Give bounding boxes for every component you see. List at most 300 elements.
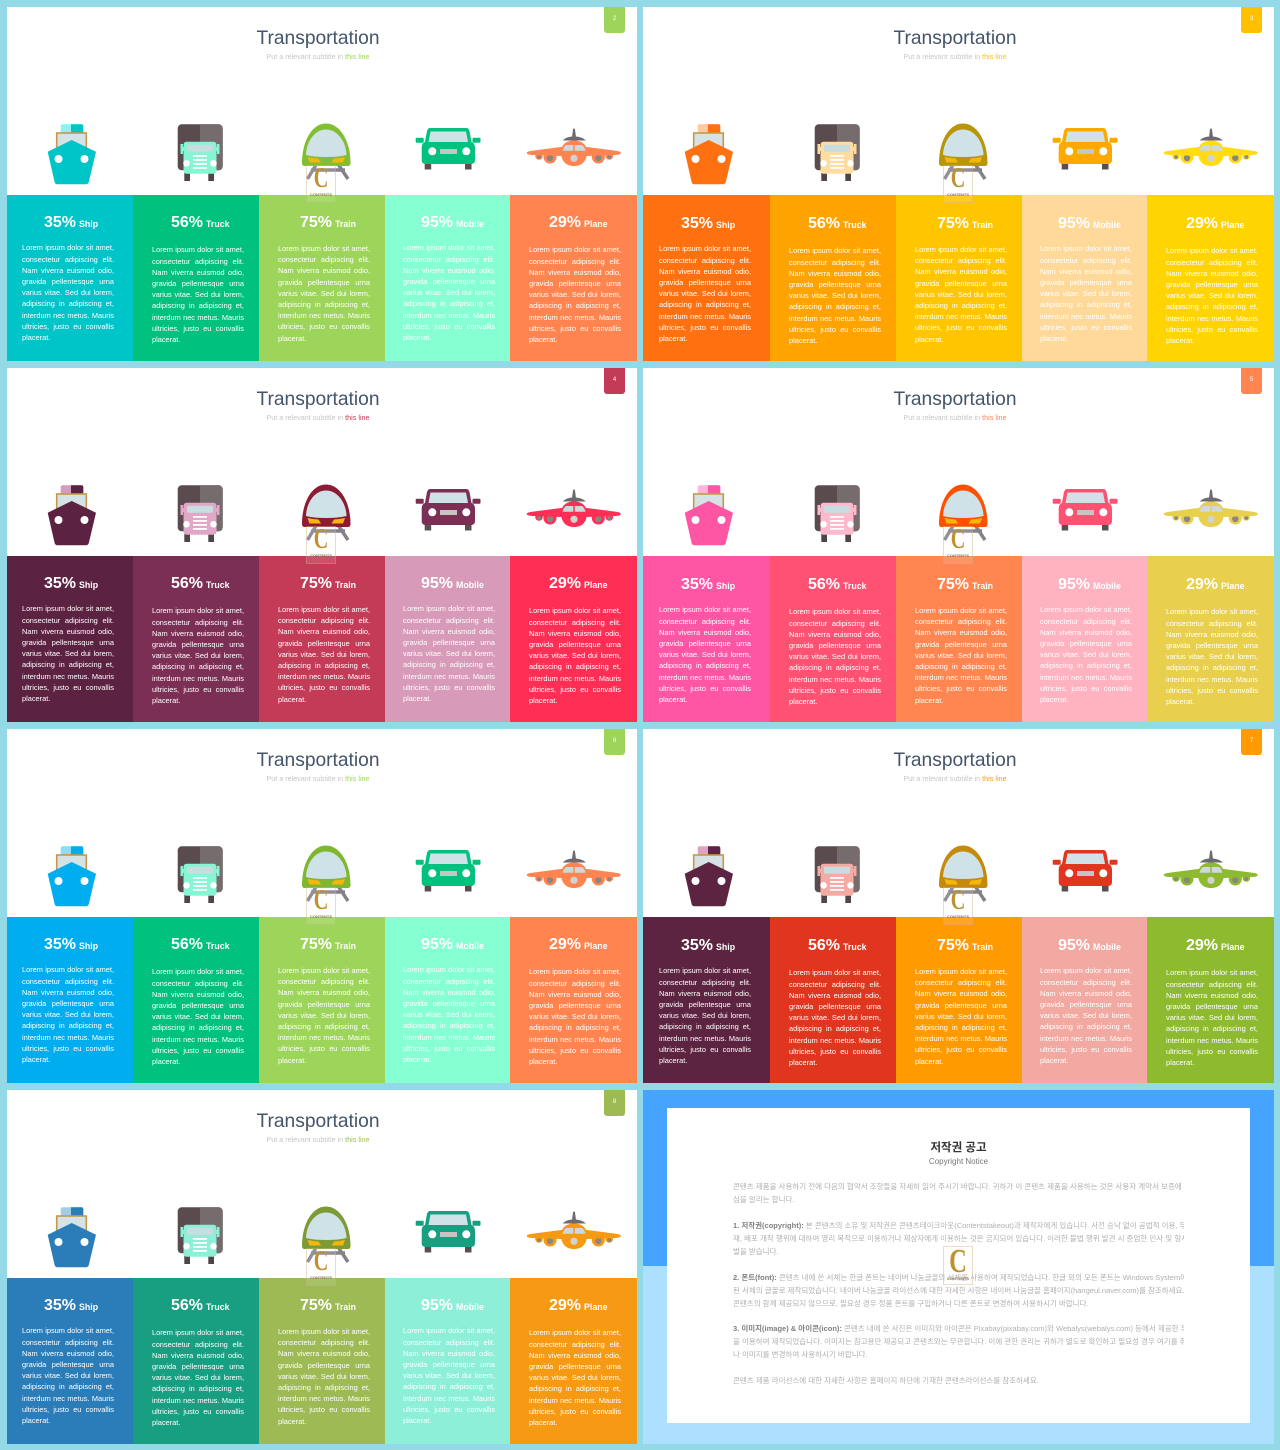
icon: plane	[527, 850, 621, 888]
watermark	[943, 165, 973, 203]
panel: mobile: interdum nec metus. Mauris	[403, 1033, 495, 1042]
panel: mobile: gravida pellentesque urna	[1040, 1000, 1132, 1009]
page number tab: 8	[613, 1099, 616, 1105]
icon: truck	[178, 846, 223, 903]
title: Transportation	[893, 388, 1016, 410]
icon: car	[416, 1211, 480, 1252]
panel: ship: consectetur adipiscing elit.	[22, 1338, 114, 1347]
panel: train: 75% Train	[300, 214, 356, 231]
panel: ship: consectetur adipiscing elit.	[659, 978, 751, 987]
slide 7: burgundy, red and olive theme	[644, 729, 1274, 1083]
watermark: C	[951, 524, 965, 555]
panel: mobile: adipiscing in adipiscing et,	[403, 660, 495, 669]
panel: plane: consectetur adipiscing elit.	[1166, 619, 1258, 628]
notice heading: 저작권 공고	[930, 1142, 987, 1154]
panel: plane	[1146, 917, 1274, 1083]
panel: mobile: placerat.	[1040, 1056, 1068, 1065]
panel: train: consectetur adipiscing elit.	[278, 977, 370, 986]
panel: train: interdum nec metus. Mauris	[278, 1033, 370, 1042]
panel: mobile: Nam viverra euismod odio,	[1040, 267, 1132, 276]
panel: train: interdum nec metus. Mauris	[915, 1034, 1007, 1043]
panel: train: 75% Train	[937, 215, 993, 232]
panel: plane: placerat.	[529, 1057, 557, 1066]
panel: ship: interdum nec metus. Mauris	[659, 1034, 751, 1043]
panel: truck: interdum nec metus. Mauris	[789, 675, 881, 684]
panel: ship: varius vitae. Sed dui lorem,	[22, 288, 114, 297]
panel: plane: Lorem ipsum dolor sit amet,	[1166, 246, 1258, 255]
panel: train: Nam viverra euismod odio,	[278, 988, 370, 997]
panel: ship	[7, 195, 132, 361]
panel: mobile: 95% Mobile	[1058, 215, 1121, 232]
panel: train: consectetur adipiscing elit.	[915, 256, 1007, 265]
watermark: CONTENTS	[310, 914, 332, 919]
icons row	[48, 124, 621, 184]
panel: truck: consectetur adipiscing elit.	[789, 980, 881, 989]
panel: ship	[643, 917, 770, 1083]
panel: ship: Nam viverra euismod odio,	[22, 1349, 114, 1358]
panel: plane: consectetur adipiscing elit.	[529, 979, 621, 988]
icons row	[684, 846, 1258, 906]
panel: ship: gravida pellentesque urna	[659, 639, 751, 648]
panel: mobile: 95% Mobile	[1058, 937, 1121, 954]
panel: mobile: Lorem ipsum dolor sit amet,	[1040, 605, 1132, 614]
panel: ship: consectetur adipiscing elit.	[22, 255, 114, 264]
panel: ship: ultricies, justo eu convallis	[22, 322, 114, 331]
panel: ship: ultricies, justo eu convallis	[659, 323, 751, 332]
panel: train: Nam viverra euismod odio,	[278, 1349, 370, 1358]
panel: truck: 56% Truck	[808, 937, 867, 954]
panel: plane: gravida pellentesque urna	[529, 1001, 621, 1010]
panel: truck: varius vitae. Sed dui lorem,	[152, 1373, 244, 1382]
panel: plane: interdum nec metus. Mauris	[1166, 314, 1258, 323]
panel: truck: 56% Truck	[171, 575, 230, 592]
panel: mobile: adipiscing in adipiscing et,	[403, 1382, 495, 1391]
panel: truck: Nam viverra euismod odio,	[152, 990, 244, 999]
panel: train: interdum nec metus. Mauris	[278, 672, 370, 681]
icon: train	[939, 846, 988, 901]
panel: truck: Lorem ipsum dolor sit amet,	[789, 968, 881, 977]
panel: plane: Lorem ipsum dolor sit amet,	[1166, 968, 1258, 977]
panel: train: placerat.	[915, 696, 943, 705]
panel: truck: varius vitae. Sed dui lorem,	[789, 1013, 881, 1022]
panel: plane: ultricies, justo eu convallis	[529, 1407, 621, 1416]
page number tab: 3	[1250, 16, 1253, 22]
panel: train: varius vitae. Sed dui lorem,	[278, 1372, 370, 1381]
panel: ship: placerat.	[659, 1056, 687, 1065]
panel: train: Nam viverra euismod odio,	[915, 267, 1007, 276]
watermark	[943, 1246, 973, 1285]
panel: mobile: ultricies, justo eu convallis	[403, 322, 495, 331]
panel: mobile: 95% Mobile	[1058, 576, 1121, 593]
icons row	[48, 846, 621, 906]
subtitle: Put a relevant subtitle in this line	[903, 52, 1007, 61]
panel: plane: adipiscing in adipiscing et,	[529, 662, 621, 671]
watermark	[306, 526, 336, 564]
panel: train: adipiscing in adipiscing et,	[915, 301, 1007, 310]
panel: train	[896, 195, 1022, 361]
panel: plane: Nam viverra euismod odio,	[529, 1351, 621, 1360]
icon: ship	[48, 846, 96, 906]
panel: mobile: 95% Mobile	[421, 936, 484, 953]
panel: train: Lorem ipsum dolor sit amet,	[278, 966, 370, 975]
page number tab	[604, 1090, 625, 1116]
subtitle: Put a relevant subtitle in this line	[903, 413, 1007, 422]
icon: car	[1053, 850, 1118, 892]
icon: train	[302, 484, 350, 540]
panel: train: consectetur adipiscing elit.	[278, 616, 370, 625]
title: Transportation	[893, 750, 1016, 770]
panel: plane	[510, 195, 637, 361]
panel: train: Lorem ipsum dolor sit amet,	[915, 606, 1007, 615]
panel: ship: placerat.	[659, 695, 687, 704]
panel: plane: adipiscing in adipiscing et,	[1166, 302, 1258, 311]
panel: truck: Nam viverra euismod odio,	[152, 1351, 244, 1360]
panel: mobile: gravida pellentesque urna	[403, 277, 495, 286]
panel: plane: ultricies, justo eu convallis	[529, 324, 621, 333]
panel: mobile: varius vitae. Sed dui lorem,	[403, 1371, 495, 1380]
panel: mobile: Nam viverra euismod odio,	[1040, 628, 1132, 637]
panel: truck: 56% Truck	[808, 576, 867, 593]
icon: plane	[1164, 850, 1258, 888]
panel: plane: gravida pellentesque urna	[529, 279, 621, 288]
panel: ship: consectetur adipiscing elit.	[22, 616, 114, 625]
panel: truck: adipiscing in adipiscing et,	[789, 663, 881, 672]
panel: plane: Lorem ipsum dolor sit amet,	[529, 1328, 621, 1337]
panel: truck: interdum nec metus. Mauris	[152, 1035, 244, 1044]
panel: ship: 35% Ship	[44, 214, 98, 231]
panel: mobile	[1022, 556, 1146, 722]
panel: mobile: Nam viverra euismod odio,	[403, 988, 495, 997]
panel: mobile: consectetur adipiscing elit.	[1040, 256, 1132, 265]
icon: car	[1053, 489, 1118, 530]
panel: train: gravida pellentesque urna	[915, 279, 1007, 288]
panel: plane: varius vitae. Sed dui lorem,	[529, 651, 621, 660]
intro text: 심을 알리는 합니다.	[733, 1195, 794, 1204]
panel: mobile: placerat.	[403, 694, 431, 703]
panel: truck	[770, 195, 896, 361]
panel: train: ultricies, justo eu convallis	[915, 323, 1007, 332]
panel: plane: gravida pellentesque urna	[529, 1362, 621, 1371]
panel: truck: interdum nec metus. Mauris	[789, 314, 881, 323]
panel: train: placerat.	[915, 335, 943, 344]
panel: ship: varius vitae. Sed dui lorem,	[22, 1371, 114, 1380]
icon: ship	[48, 124, 96, 184]
icon: plane	[527, 128, 621, 166]
panel: mobile: gravida pellentesque urna	[403, 1360, 495, 1369]
watermark	[306, 165, 336, 203]
panel: truck: Lorem ipsum dolor sit amet,	[789, 246, 881, 255]
watermark: CONTENTS	[310, 553, 332, 558]
panel: train: ultricies, justo eu convallis	[915, 1045, 1007, 1054]
icon: ship	[685, 485, 733, 545]
slide 3: orange and yellow theme	[644, 7, 1274, 361]
panel: plane: ultricies, justo eu convallis	[1166, 686, 1258, 695]
icon: train	[302, 846, 350, 901]
panel: train: ultricies, justo eu convallis	[278, 1405, 370, 1414]
panel: plane: varius vitae. Sed dui lorem,	[1166, 291, 1258, 300]
panel: plane: placerat.	[529, 1418, 557, 1427]
panel: train: interdum nec metus. Mauris	[278, 311, 370, 320]
panel: ship: Nam viverra euismod odio,	[659, 989, 751, 998]
panel: plane: consectetur adipiscing elit.	[529, 618, 621, 627]
panel: ship: consectetur adipiscing elit.	[659, 617, 751, 626]
panel: train: ultricies, justo eu convallis	[278, 1044, 370, 1053]
panel: ship: placerat.	[22, 1416, 50, 1425]
panel: ship	[7, 1278, 132, 1444]
panel: ship: adipiscing in adipiscing et,	[22, 1021, 114, 1030]
panel: ship: gravida pellentesque urna	[659, 1000, 751, 1009]
icon: truck	[178, 124, 223, 181]
panel: ship: Nam viverra euismod odio,	[659, 267, 751, 276]
panel: mobile: consectetur adipiscing elit.	[403, 616, 495, 625]
panel: ship: gravida pellentesque urna	[22, 999, 114, 1008]
panel: ship: varius vitae. Sed dui lorem,	[22, 1010, 114, 1019]
panel: plane: consectetur adipiscing elit.	[529, 1340, 621, 1349]
panel: mobile: placerat.	[403, 333, 431, 342]
panel: truck	[132, 195, 258, 361]
panel: truck: Nam viverra euismod odio,	[789, 269, 881, 278]
panel: mobile: consectetur adipiscing elit.	[1040, 978, 1132, 987]
panel: ship: varius vitae. Sed dui lorem,	[659, 650, 751, 659]
panel: ship: varius vitae. Sed dui lorem,	[659, 289, 751, 298]
panel: truck: ultricies, justo eu convallis	[789, 1047, 881, 1056]
panel: ship: gravida pellentesque urna	[22, 277, 114, 286]
panel: truck: gravida pellentesque urna	[152, 279, 244, 288]
watermark: C	[949, 1243, 967, 1280]
panel: train	[258, 195, 385, 361]
panel: train: adipiscing in adipiscing et,	[278, 300, 370, 309]
panel: ship	[7, 556, 132, 722]
panel: truck: gravida pellentesque urna	[789, 280, 881, 289]
panel: plane: placerat.	[1166, 697, 1194, 706]
panel: truck: ultricies, justo eu convallis	[152, 324, 244, 333]
panel: truck: 56% Truck	[171, 936, 230, 953]
panel: mobile: Lorem ipsum dolor sit amet,	[1040, 966, 1132, 975]
panel: mobile: consectetur adipiscing elit.	[1040, 617, 1132, 626]
panel: train: adipiscing in adipiscing et,	[278, 1022, 370, 1031]
panel: ship	[643, 556, 770, 722]
title: Transportation	[256, 1110, 380, 1132]
panel: train: gravida pellentesque urna	[278, 1361, 370, 1370]
panel: train: gravida pellentesque urna	[278, 639, 370, 648]
subtitle: Put a relevant subtitle in this line	[266, 413, 370, 422]
panel: mobile: varius vitae. Sed dui lorem,	[1040, 289, 1132, 298]
panel: mobile: Lorem ipsum dolor sit amet,	[403, 1326, 495, 1335]
icon: car	[1053, 128, 1118, 170]
panel: mobile	[1022, 195, 1146, 361]
panel: train: varius vitae. Sed dui lorem,	[915, 1012, 1007, 1021]
panel: train: varius vitae. Sed dui lorem,	[278, 650, 370, 659]
panel: truck	[132, 917, 258, 1083]
panel: mobile: interdum nec metus. Mauris	[403, 311, 495, 320]
panel: ship: adipiscing in adipiscing et,	[659, 661, 751, 670]
icons row	[48, 484, 621, 546]
panel: ship: gravida pellentesque urna	[22, 638, 114, 647]
panel: train: placerat.	[915, 1057, 943, 1066]
icon: truck	[178, 1207, 223, 1264]
watermark: CONTENTS	[947, 914, 969, 919]
panel: mobile: interdum nec metus. Mauris	[1040, 312, 1132, 321]
panel: train: ultricies, justo eu convallis	[278, 683, 370, 692]
clause 3: image and icon: 나 이미지를 변경하여 사용하시기 바랍니다.	[733, 1350, 868, 1359]
panel: train: interdum nec metus. Mauris	[915, 312, 1007, 321]
panel: train: gravida pellentesque urna	[278, 1000, 370, 1009]
slide 5: pink theme	[644, 368, 1274, 722]
icon: train	[939, 484, 988, 540]
panel: ship: Nam viverra euismod odio,	[22, 627, 114, 636]
panel: truck: consectetur adipiscing elit.	[152, 618, 244, 627]
panel: truck	[770, 917, 896, 1083]
panel: mobile	[385, 195, 510, 361]
page number tab	[1241, 729, 1262, 755]
panel: truck: gravida pellentesque urna	[789, 641, 881, 650]
panel: mobile	[385, 917, 510, 1083]
slide 8: muted blue and amber theme	[7, 1090, 637, 1444]
icon: plane	[1164, 489, 1258, 527]
panel: ship: Lorem ipsum dolor sit amet,	[22, 604, 114, 613]
icons row	[48, 1206, 621, 1268]
panel: mobile	[385, 1278, 510, 1444]
panel: ship: interdum nec metus. Mauris	[22, 311, 114, 320]
panel: plane: gravida pellentesque urna	[1166, 641, 1258, 650]
panel: ship: ultricies, justo eu convallis	[22, 1405, 114, 1414]
panel: plane: interdum nec metus. Mauris	[529, 674, 621, 683]
panel: truck: ultricies, justo eu convallis	[152, 1046, 244, 1055]
icon: plane	[1164, 128, 1258, 166]
panel: ship: ultricies, justo eu convallis	[22, 1044, 114, 1053]
subtitle: Put a relevant subtitle in this line	[903, 774, 1007, 783]
panel: train	[258, 917, 385, 1083]
panel: ship: interdum nec metus. Mauris	[659, 673, 751, 682]
page number tab: 2	[613, 16, 616, 22]
panel: plane: Nam viverra euismod odio,	[529, 268, 621, 277]
icon: plane	[527, 489, 621, 527]
panel: mobile: gravida pellentesque urna	[1040, 278, 1132, 287]
panel: ship: varius vitae. Sed dui lorem,	[659, 1011, 751, 1020]
panel: train: adipiscing in adipiscing et,	[278, 661, 370, 670]
panel: plane: varius vitae. Sed dui lorem,	[1166, 1013, 1258, 1022]
closing note: 콘텐츠 제품 라이선스에 대한 자세한 사항은 홈페이지 하단에 기재한 콘텐츠라이선스를 참조하세요.	[733, 1376, 1039, 1385]
title: Transportation	[256, 750, 380, 770]
panel: mobile: Lorem ipsum dolor sit amet,	[403, 965, 495, 974]
clause 1: copyright	[733, 1221, 1184, 1256]
panel: mobile: Lorem ipsum dolor sit amet,	[403, 604, 495, 613]
icon: truck	[815, 124, 860, 181]
white notice card	[667, 1108, 1250, 1423]
panel: truck: consectetur adipiscing elit.	[789, 619, 881, 628]
panel: plane: Nam viverra euismod odio,	[1166, 630, 1258, 639]
panel: mobile: ultricies, justo eu convallis	[1040, 323, 1132, 332]
panel: truck: gravida pellentesque urna	[789, 1002, 881, 1011]
panel: mobile: placerat.	[403, 1055, 431, 1064]
icon: car	[416, 128, 480, 170]
panel: train: placerat.	[278, 1056, 306, 1065]
panel: plane: adipiscing in adipiscing et,	[529, 1384, 621, 1393]
panel: ship: 35% Ship	[44, 575, 98, 592]
panel: ship: consectetur adipiscing elit.	[659, 256, 751, 265]
panel: truck: 56% Truck	[171, 1297, 230, 1314]
panel: truck: placerat.	[789, 336, 817, 345]
panel: truck: adipiscing in adipiscing et,	[152, 1023, 244, 1032]
panel: train: Lorem ipsum dolor sit amet,	[278, 244, 370, 253]
watermark	[306, 887, 336, 925]
panel: plane: ultricies, justo eu convallis	[1166, 1047, 1258, 1056]
page number tab	[604, 7, 625, 33]
panel: train: 75% Train	[300, 575, 356, 592]
watermark	[943, 526, 973, 564]
panel: train: Lorem ipsum dolor sit amet,	[915, 245, 1007, 254]
title: Transportation	[256, 28, 380, 48]
panel: mobile: 95% Mobile	[421, 214, 484, 231]
panel: mobile: adipiscing in adipiscing et,	[1040, 661, 1132, 670]
panel: plane: Lorem ipsum dolor sit amet,	[529, 245, 621, 254]
panel: mobile: varius vitae. Sed dui lorem,	[1040, 1011, 1132, 1020]
panel: truck: interdum nec metus. Mauris	[789, 1036, 881, 1045]
panel: mobile	[385, 556, 510, 722]
panel: truck: Lorem ipsum dolor sit amet,	[789, 607, 881, 616]
panel: ship: adipiscing in adipiscing et,	[22, 660, 114, 669]
panel: plane: 29% Plane	[549, 214, 608, 231]
panel: truck: Lorem ipsum dolor sit amet,	[152, 967, 244, 976]
panel: train: 75% Train	[300, 1297, 356, 1314]
panel: truck: interdum nec metus. Mauris	[152, 1396, 244, 1405]
page number tab: 6	[613, 738, 616, 744]
panel: truck: adipiscing in adipiscing et,	[152, 662, 244, 671]
panel: ship: Lorem ipsum dolor sit amet,	[22, 1326, 114, 1335]
panel: train: ultricies, justo eu convallis	[915, 684, 1007, 693]
panel: mobile: consectetur adipiscing elit.	[403, 1338, 495, 1347]
panel: truck: Lorem ipsum dolor sit amet,	[152, 606, 244, 615]
watermark	[943, 887, 973, 925]
panel: truck: Nam viverra euismod odio,	[789, 630, 881, 639]
watermark: C	[951, 885, 965, 916]
panel: train: interdum nec metus. Mauris	[278, 1394, 370, 1403]
title: Transportation	[893, 28, 1016, 48]
panel: ship: Lorem ipsum dolor sit amet,	[22, 965, 114, 974]
panel: plane: interdum nec metus. Mauris	[1166, 675, 1258, 684]
panel: truck: ultricies, justo eu convallis	[152, 685, 244, 694]
panel: train: ultricies, justo eu convallis	[278, 322, 370, 331]
panel: truck: ultricies, justo eu convallis	[152, 1407, 244, 1416]
panel: plane: 29% Plane	[549, 575, 608, 592]
panel: mobile: placerat.	[1040, 695, 1068, 704]
panel: ship: interdum nec metus. Mauris	[659, 312, 751, 321]
panel: ship: varius vitae. Sed dui lorem,	[22, 649, 114, 658]
panel: plane	[1146, 195, 1274, 361]
panel: mobile: placerat.	[1040, 334, 1068, 343]
panel: truck: gravida pellentesque urna	[152, 1001, 244, 1010]
panel: truck: placerat.	[789, 697, 817, 706]
watermark: C	[951, 163, 965, 194]
panel: plane: interdum nec metus. Mauris	[529, 1396, 621, 1405]
watermark: CONTENTS	[310, 1275, 332, 1280]
icon: plane	[527, 1211, 621, 1249]
panel: mobile: ultricies, justo eu convallis	[403, 683, 495, 692]
panel: mobile: Nam viverra euismod odio,	[403, 1349, 495, 1358]
intro text	[733, 1182, 1184, 1204]
panel: train: gravida pellentesque urna	[915, 1001, 1007, 1010]
panel: plane: adipiscing in adipiscing et,	[529, 301, 621, 310]
panel: mobile	[1022, 917, 1146, 1083]
panel: ship: Lorem ipsum dolor sit amet,	[22, 243, 114, 252]
panel: plane: ultricies, justo eu convallis	[1166, 325, 1258, 334]
panel: train	[258, 556, 385, 722]
panel: train: interdum nec metus. Mauris	[915, 673, 1007, 682]
panel: plane: gravida pellentesque urna	[1166, 1002, 1258, 1011]
panel: ship: Nam viverra euismod odio,	[22, 266, 114, 275]
clause 3: image and icon	[733, 1324, 1184, 1359]
panel: plane: varius vitae. Sed dui lorem,	[529, 290, 621, 299]
